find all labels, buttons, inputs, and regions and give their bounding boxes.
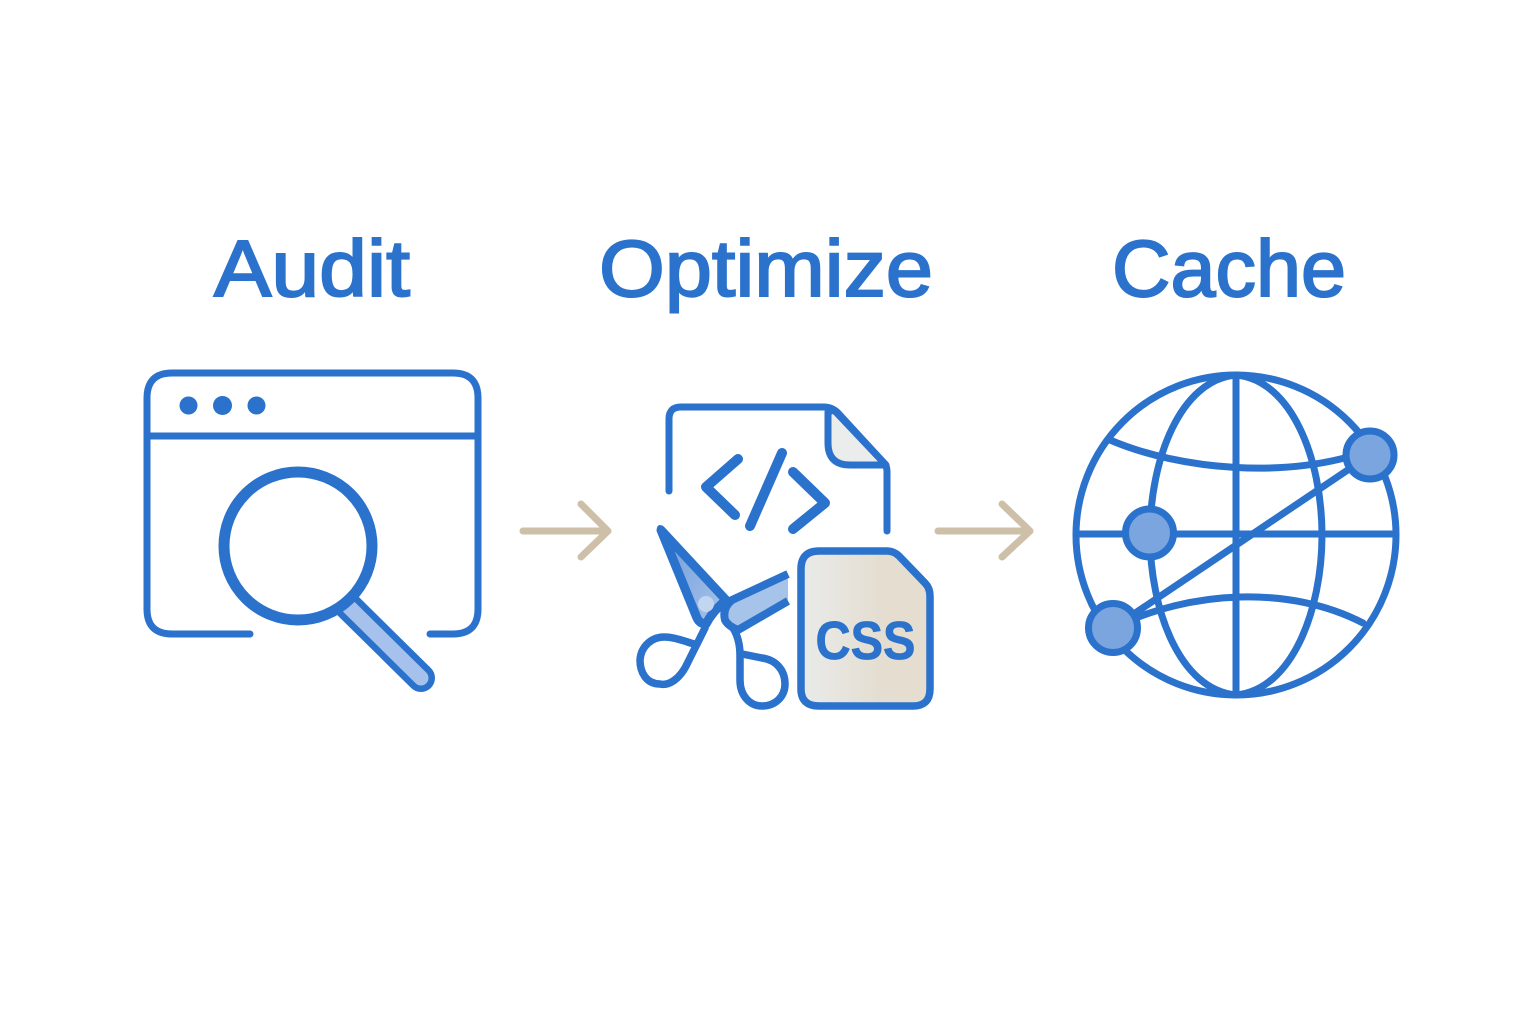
arrow: audit to optimize — [523, 504, 608, 557]
globe outline — [1076, 375, 1396, 695]
magnifying glass lens — [224, 472, 372, 620]
icon: code file, scissors and CSS file — [640, 407, 930, 706]
document folded corner — [828, 410, 886, 465]
heading: Optimize: Optimize — [599, 224, 933, 313]
icon: globe with network nodes — [1076, 375, 1396, 695]
scissors handle left — [640, 628, 705, 684]
browser window dots — [180, 396, 266, 415]
CSS file label: CSS — [816, 611, 916, 671]
magnifying glass handle — [346, 604, 421, 678]
network node middle left — [1126, 509, 1174, 557]
arrow: optimize to cache — [938, 504, 1030, 557]
browser window frame — [147, 373, 478, 634]
network node lower left — [1088, 604, 1138, 652]
CSS file badge — [801, 551, 930, 706]
icon: browser window with magnifying glass — [147, 373, 478, 678]
code document outline — [669, 407, 887, 531]
scissors blade left — [660, 528, 726, 624]
globe meridians — [1150, 375, 1322, 695]
globe latitude lines — [1078, 440, 1394, 628]
scissors handle right — [733, 628, 785, 706]
network node upper right — [1346, 431, 1394, 479]
heading: Cache: Cache — [1112, 224, 1346, 313]
scissors blade right — [724, 574, 788, 630]
browser title bar divider — [148, 432, 477, 440]
network link — [1113, 455, 1370, 628]
heading: Audit: Audit — [214, 224, 410, 313]
code symbol — [706, 453, 825, 529]
